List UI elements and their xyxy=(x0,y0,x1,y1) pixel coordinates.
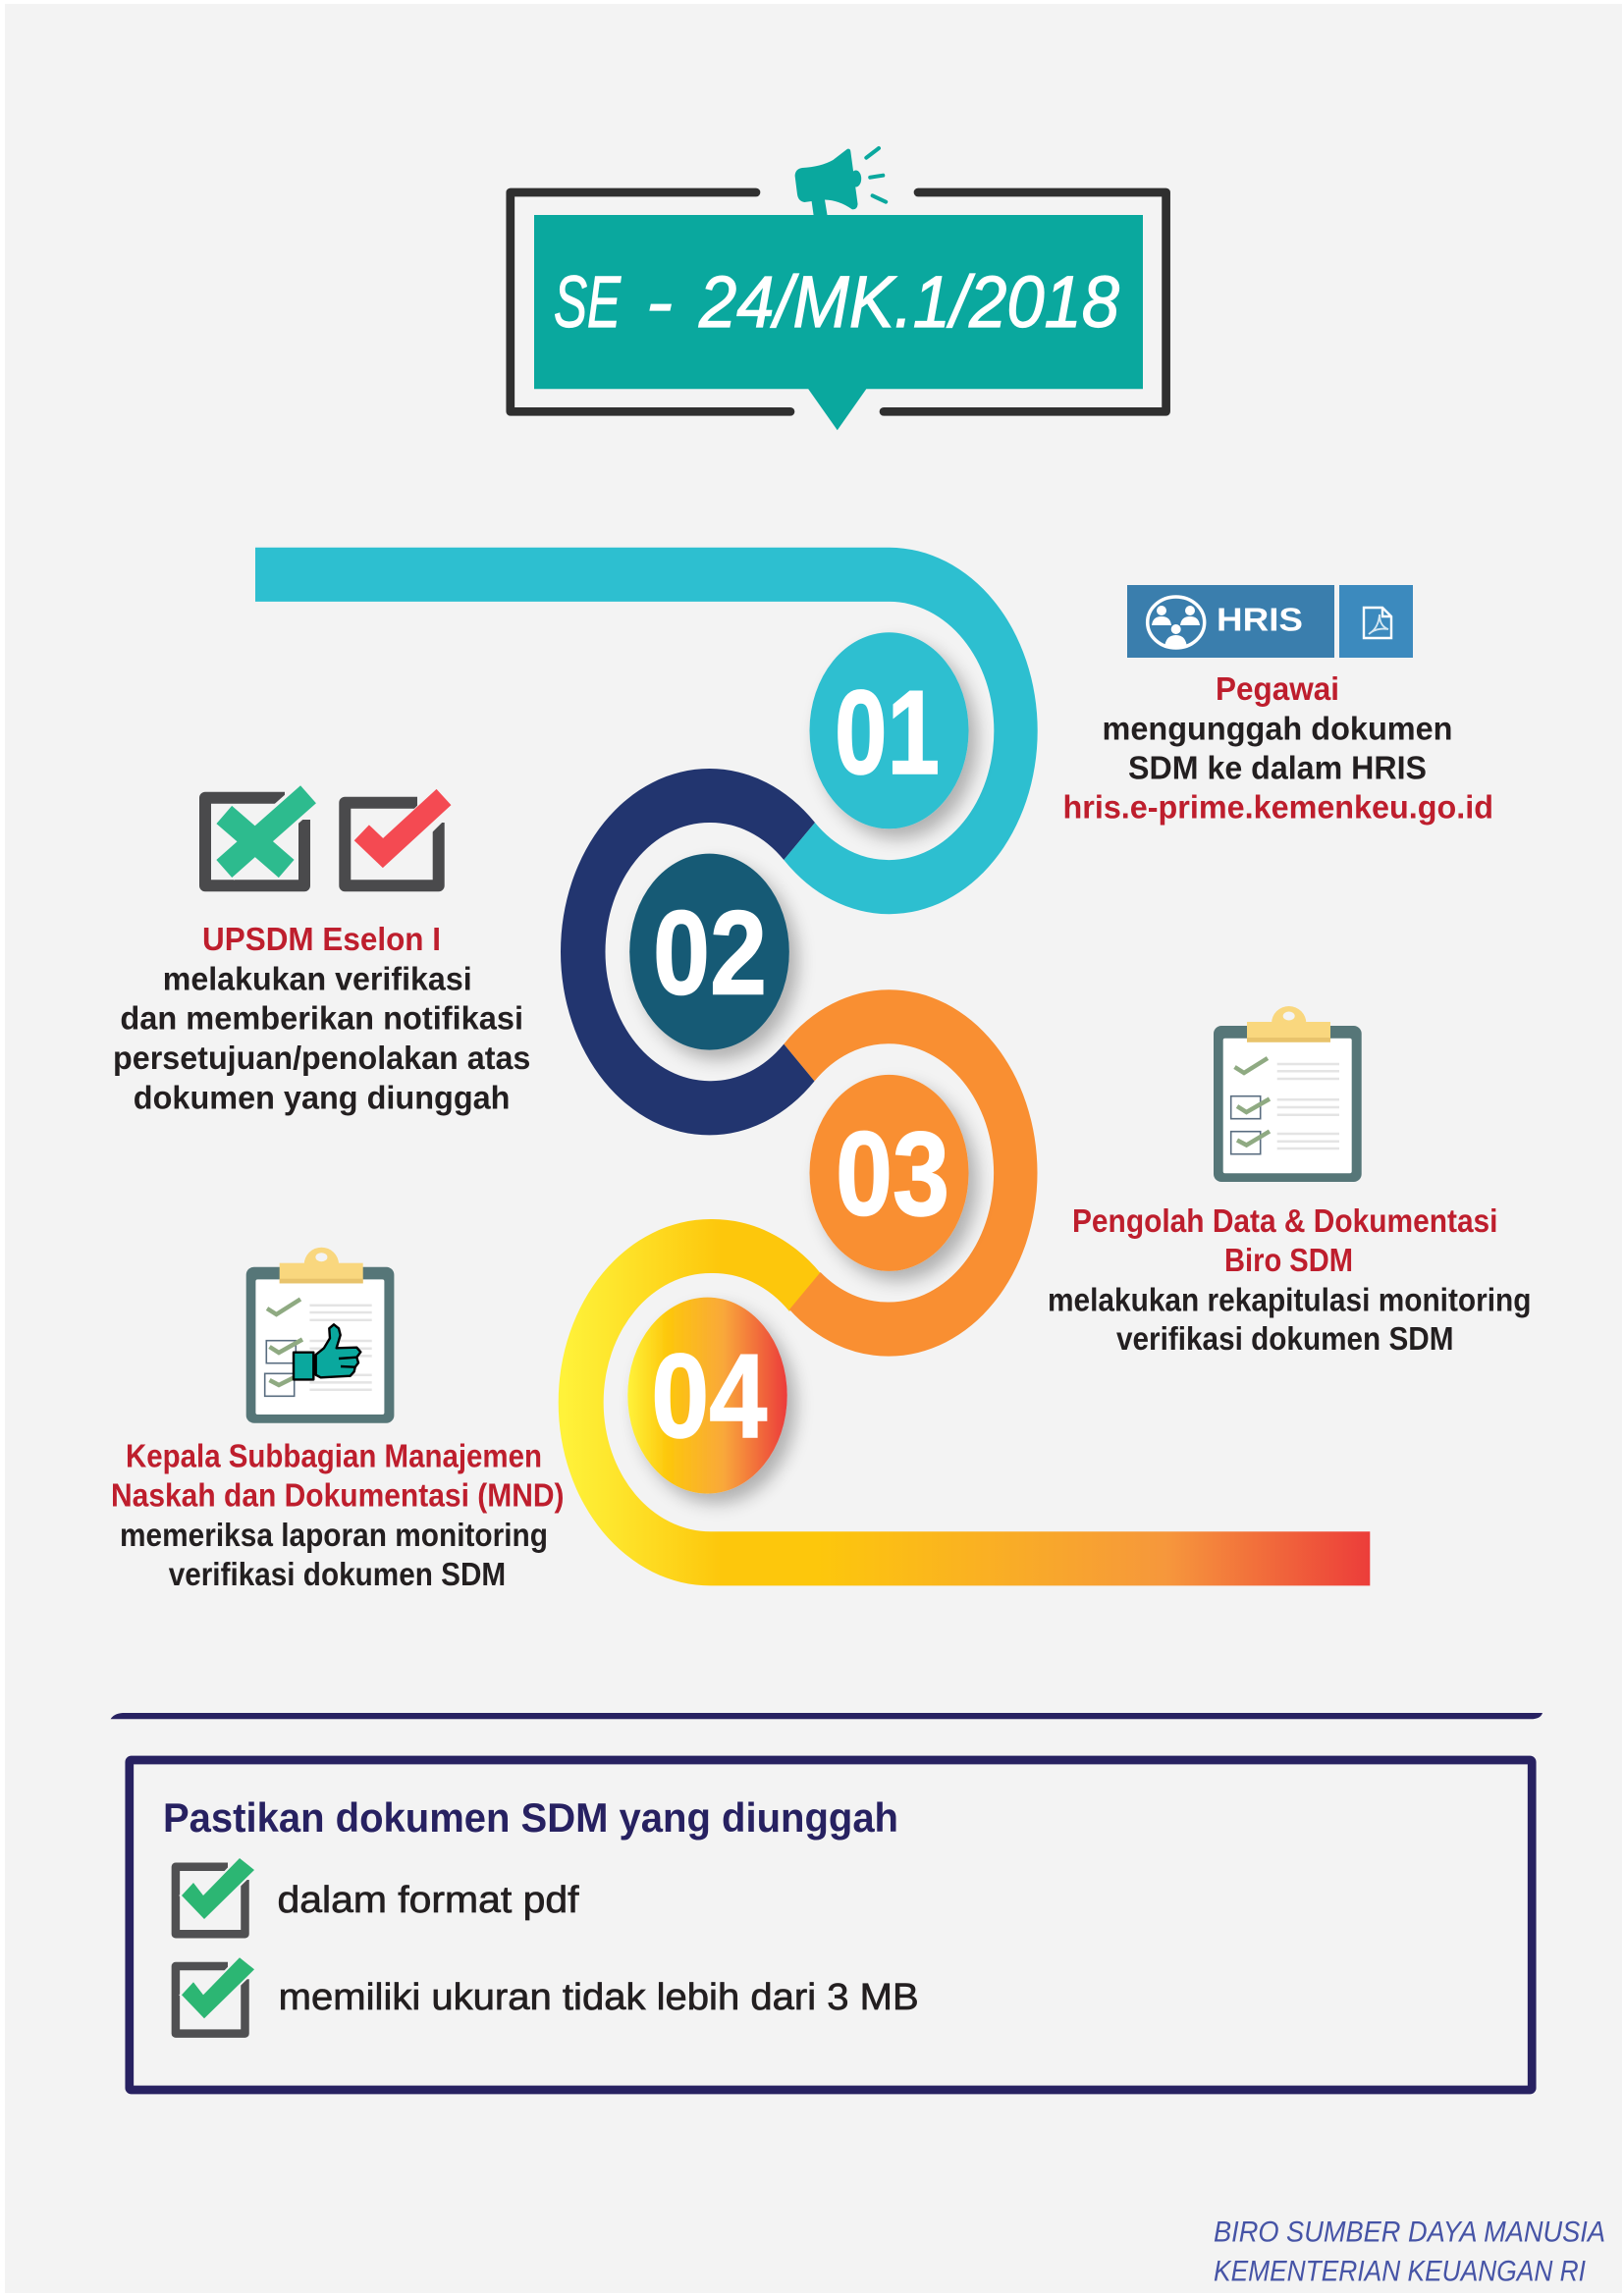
text block: step 03 Pengolah Data: Biro SDM xyxy=(1224,1242,1353,1278)
text block: step 03 Pengolah Data: Pengolah Data & Dokumentasi xyxy=(1072,1202,1498,1239)
icon: HRIS button xyxy=(1127,585,1334,658)
text block: step 03 Pengolah Data: verifikasi dokumen SDM xyxy=(1116,1320,1453,1357)
icon: PDF button xyxy=(1339,585,1413,658)
text block: step 04 Kepala Subbagian: Kepala Subbagian Manajemen xyxy=(126,1437,542,1474)
icon: megaphone xyxy=(795,148,886,218)
icon: red check checkbox xyxy=(345,797,444,885)
text block: step 01 Pegawai: Pegawai xyxy=(1216,670,1339,707)
text block: step 01 Pegawai: SDM ke dalam HRIS xyxy=(1128,750,1427,785)
title text: - xyxy=(646,261,673,343)
title text: 24/MK.1/2018 xyxy=(698,261,1119,343)
text block: step 04 Kepala Subbagian: Naskah dan Dokumentasi (MND) xyxy=(111,1476,564,1514)
requirement 1: dalam format pdf xyxy=(277,1880,579,1921)
icon: clipboard with thumbs up xyxy=(246,1248,394,1423)
title speech box xyxy=(534,215,1143,430)
text block: step 02 UPSDM: UPSDM Eselon I xyxy=(202,921,441,957)
icon: people circle xyxy=(1148,597,1205,648)
text block: step 03 Pengolah Data: melakukan rekapitulasi monitoring xyxy=(1048,1282,1532,1317)
title banner xyxy=(511,148,1166,430)
icon: clipboard checklist xyxy=(1214,1006,1362,1182)
step badge 03: 03 xyxy=(836,1107,949,1241)
step badge 04 xyxy=(627,1298,787,1494)
title text: SE xyxy=(554,261,622,343)
text block: step 01 Pegawai: mengunggah dokumen xyxy=(1102,711,1453,746)
requirement 2: memiliki ukuran tidak lebih dari 3 MB xyxy=(279,1977,919,2018)
icon: cross checkbox xyxy=(205,794,308,885)
step badge 01: 01 xyxy=(835,666,940,799)
step badge 01 xyxy=(809,632,968,828)
step badge 02: 02 xyxy=(653,885,767,1019)
text block: step 01 Pegawai: hris.e-prime.kemenkeu.go.id xyxy=(1062,789,1493,825)
text block: step 02 UPSDM: melakukan verifikasi xyxy=(163,960,472,997)
text block: step 02 UPSDM: dan memberikan notifikasi xyxy=(120,999,523,1037)
HRIS label: HRIS xyxy=(1217,601,1303,638)
footer credit xyxy=(1214,2216,1605,2287)
text block: step 01 Pegawai xyxy=(1062,670,1493,825)
ribbon 04 yellow xyxy=(559,1219,1370,1585)
step badge 04: 04 xyxy=(651,1329,767,1463)
icon: green checkbox 1 xyxy=(176,1858,254,1934)
flow ribbon xyxy=(255,548,1370,1585)
text block: step 02 UPSDM xyxy=(113,921,530,1115)
icon: green checkbox 2 xyxy=(176,1957,254,2034)
ribbon 03 orange xyxy=(784,989,1037,1357)
ribbon 02 navy xyxy=(561,769,815,1135)
text block: step 04 Kepala Subbagian xyxy=(111,1437,564,1592)
text block: step 04 Kepala Subbagian: memeriksa laporan monitoring xyxy=(120,1517,548,1553)
step badge 02 xyxy=(629,854,789,1050)
panel: upload requirements xyxy=(130,1760,1532,2090)
divider xyxy=(111,1713,1543,1719)
icon: thumbs up hand xyxy=(294,1324,360,1379)
text block: step 02 UPSDM: dokumen yang diunggah xyxy=(134,1079,511,1115)
text block: step 04 Kepala Subbagian: verifikasi dokumen SDM xyxy=(169,1556,506,1592)
text block: step 03 Pengolah Data xyxy=(1048,1202,1532,1357)
title frame xyxy=(511,192,1166,411)
panel heading: Pastikan dokumen SDM yang diunggah xyxy=(163,1794,898,1841)
ribbon 01 teal xyxy=(255,548,1038,914)
step badge 03 xyxy=(809,1075,968,1271)
text block: step 02 UPSDM: persetujuan/penolakan atas xyxy=(113,1040,530,1076)
